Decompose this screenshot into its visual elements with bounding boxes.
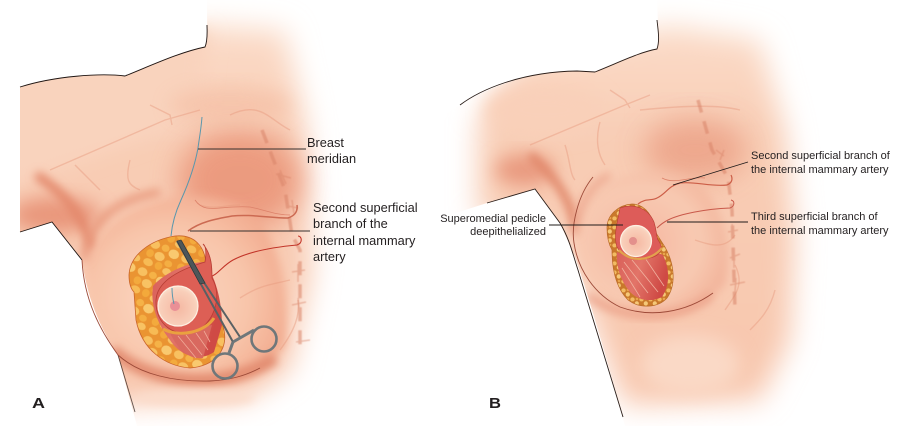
panel letter A: A xyxy=(32,395,45,412)
panel B: torso with deepithelialized pedicle xyxy=(440,20,891,417)
flap fat rim A xyxy=(163,318,214,333)
leader: breast meridian xyxy=(198,148,306,150)
upper artery branches A xyxy=(195,200,290,215)
areola B xyxy=(620,226,652,256)
clamp ring upper xyxy=(252,326,276,352)
third superficial artery B xyxy=(657,200,734,228)
torso skin A xyxy=(0,25,312,406)
label: breast meridian: Breast xyxy=(307,135,344,150)
clamp jaws xyxy=(177,241,240,342)
nipple A xyxy=(170,301,180,311)
flap with fat A xyxy=(129,236,225,368)
torso skin B xyxy=(478,25,795,405)
label: second superficial branch A: branch of the xyxy=(313,216,388,231)
pedicle fat rim B xyxy=(619,248,662,259)
third superficial artery A xyxy=(208,236,301,278)
breast contour A xyxy=(82,260,260,381)
label: second superficial branch B: Second superficial branch of xyxy=(751,150,891,162)
clamp shanks xyxy=(229,330,254,353)
label: superomedial pedicle: Superomedial pedicle xyxy=(440,213,546,225)
upper artery branch B xyxy=(662,178,705,181)
sternal suture band B xyxy=(698,100,745,310)
body outline B xyxy=(460,20,659,417)
flap with fat B xyxy=(607,204,673,306)
clamp tip xyxy=(177,240,205,284)
leader: third branch B xyxy=(667,221,748,223)
breast contour B xyxy=(573,177,713,313)
fat layer B xyxy=(607,204,673,306)
label: second superficial branch B: the internal mammary artery xyxy=(751,164,889,176)
label: breast meridian: meridian xyxy=(307,151,356,166)
fat layer A xyxy=(129,236,225,368)
exposed muscle B xyxy=(617,252,668,300)
label: second superficial branch A: artery xyxy=(313,249,346,264)
leader: second branch A xyxy=(190,230,310,232)
second superficial artery B xyxy=(638,175,732,204)
leader: second branch B xyxy=(673,162,748,185)
label: third superficial branch B: the internal mammary artery xyxy=(751,225,889,237)
nipple B xyxy=(629,237,637,245)
vessels on chest A xyxy=(50,105,298,350)
breast meridian line A xyxy=(171,117,202,236)
chest wall fibres A xyxy=(170,325,212,358)
leader: pedicle xyxy=(549,224,623,226)
clamp ring lower xyxy=(212,354,238,378)
exposed muscle A xyxy=(152,262,222,357)
clamp xyxy=(177,240,276,378)
panel letter B: B xyxy=(489,395,501,412)
panel A: torso with clamp xyxy=(0,25,418,412)
fibre strokes A xyxy=(178,331,210,358)
label: superomedial pedicle: deepithelialized xyxy=(470,226,546,238)
deepithelialized pedicle B xyxy=(615,206,661,260)
sternal suture band A xyxy=(262,130,310,350)
meridian on areola A xyxy=(172,288,174,304)
chest wall fibres B xyxy=(622,258,664,297)
label: second superficial branch A: Second superficial xyxy=(313,200,418,215)
label: third superficial branch B: Third superficial branch of xyxy=(751,211,879,223)
label: second superficial branch A: internal mammary xyxy=(313,233,416,248)
second superficial artery A xyxy=(188,205,297,231)
vessels on chest B xyxy=(530,90,775,330)
body outline A xyxy=(20,25,207,412)
areola A xyxy=(158,286,198,326)
pedicle flap A xyxy=(156,244,217,333)
